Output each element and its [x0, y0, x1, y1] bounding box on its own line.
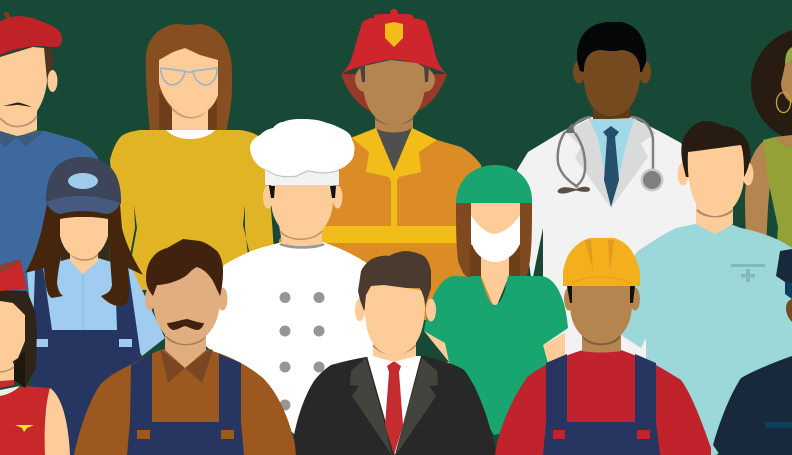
worker ears — [564, 288, 574, 310]
beret man neck shadow — [0, 116, 37, 126]
suit neck — [373, 335, 416, 362]
figure: police officer — [713, 249, 792, 455]
doctor white coat lapels — [566, 118, 656, 208]
doctor face — [584, 50, 640, 116]
figure: man in beret — [0, 12, 112, 300]
chef sideburns — [269, 186, 336, 198]
scrubs man plus sign — [741, 269, 755, 282]
suit neck shadow — [373, 345, 416, 354]
cap woman neck shadow — [71, 254, 98, 260]
afro hair — [751, 28, 792, 142]
cap woman light blue shirt — [27, 258, 165, 356]
worker overalls — [543, 354, 660, 455]
afro woman arm — [745, 140, 772, 250]
afro woman headband — [785, 47, 792, 65]
stethoscope chest piece — [640, 168, 664, 192]
firefighter helmet badge — [385, 22, 403, 47]
officer cap band — [785, 281, 792, 299]
firefighter yellow stripes — [300, 177, 462, 243]
nurse green scrubs — [424, 276, 568, 435]
nurse arm — [424, 320, 565, 366]
cap woman face — [60, 217, 108, 259]
scrubs man neck shadow — [697, 210, 733, 216]
worker neck shadow — [583, 336, 620, 344]
sweater arm gaps — [130, 205, 250, 255]
beret — [0, 16, 62, 55]
attendant hat fold — [0, 259, 21, 273]
afro woman olive top — [763, 137, 792, 370]
cap woman shirt placket — [82, 274, 84, 330]
moustache man face — [153, 265, 220, 344]
beret man collar — [0, 131, 45, 147]
scrubs man ears — [678, 162, 688, 186]
beret man hair — [0, 46, 53, 84]
beret man face — [0, 47, 47, 124]
attendant face — [0, 301, 25, 370]
cap woman overalls — [30, 267, 145, 455]
beret man blue shirt — [0, 131, 112, 300]
beret man ear — [48, 70, 58, 92]
nurse inner hair shade — [470, 240, 520, 280]
suit lapels — [350, 358, 438, 455]
afro woman skin at neck — [775, 135, 792, 147]
attendant neck — [0, 362, 14, 385]
officer dark uniform — [713, 356, 792, 455]
glasses woman hair inner shade — [159, 90, 217, 132]
glasses woman face — [159, 48, 218, 117]
afro woman face edge — [781, 60, 792, 103]
doctor ears — [573, 60, 585, 84]
doctor neck shadow — [593, 110, 630, 118]
worker face — [570, 285, 632, 343]
figure: woman with afro — [745, 28, 792, 370]
nurse neck — [481, 250, 509, 310]
scrubs man hair — [681, 121, 750, 177]
cap woman fringe — [60, 212, 108, 219]
glasses woman yellow sweater — [110, 130, 276, 290]
cap woman hair back — [61, 205, 109, 265]
attendant red dress — [0, 386, 50, 455]
chef face — [271, 184, 333, 238]
attendant hair shade — [14, 350, 25, 388]
doctor coat sleeve gap — [533, 228, 543, 277]
chef jacket buttons — [280, 292, 324, 410]
cap woman cap brim — [46, 196, 120, 214]
nurse face — [471, 202, 520, 245]
figure: woman with glasses — [110, 24, 276, 290]
moustache man overall pockets — [137, 430, 234, 439]
doctor tie — [603, 126, 619, 207]
doctor white coat — [517, 117, 701, 380]
chef ears — [263, 186, 273, 208]
beret man moustache — [3, 102, 32, 107]
scrubs man face — [688, 145, 744, 216]
glasses woman neck — [172, 100, 208, 131]
attendant badge wings — [15, 425, 34, 432]
suit ears — [355, 298, 365, 322]
figure: construction worker in hard hat — [495, 238, 711, 455]
scrubs man pocket line — [731, 264, 765, 267]
firefighter sideburns — [360, 66, 429, 82]
chef hat puff — [250, 119, 355, 176]
scrubs man neck — [696, 195, 733, 234]
firefighter helmet — [341, 9, 447, 74]
cap woman cap crown — [46, 157, 121, 204]
moustache man collar — [160, 349, 213, 383]
firefighter yellow collar — [352, 128, 437, 187]
worker overall pockets — [553, 430, 650, 439]
attendant hair — [0, 290, 37, 388]
chef neck shadow — [280, 231, 322, 239]
glasses woman white collar — [166, 130, 215, 139]
cap woman long hair — [25, 204, 143, 306]
attendant hat — [0, 259, 27, 291]
chef hat band — [265, 165, 339, 185]
moustache man neck shadow — [166, 336, 205, 344]
nurse green cap — [456, 165, 532, 203]
stethoscope — [558, 117, 653, 187]
worker hard hat — [563, 238, 640, 286]
glasses woman neck shadow — [172, 108, 208, 118]
attendant white collar — [0, 386, 20, 396]
officer cap — [776, 249, 792, 284]
doctor hair — [577, 22, 646, 72]
doctor blue shirt — [589, 119, 634, 208]
worker red shirt — [495, 350, 711, 455]
suit tie — [385, 361, 403, 455]
officer chest stripe — [765, 422, 792, 428]
stethoscope clip — [564, 123, 575, 133]
firefighter brim underside — [341, 74, 447, 110]
beret man neck — [0, 100, 37, 137]
moustache man ears — [145, 288, 155, 310]
moustache man neck — [165, 325, 206, 368]
afro woman earring — [776, 92, 790, 112]
attendant arm — [45, 388, 70, 455]
firefighter neck — [375, 105, 413, 133]
cap woman neck — [70, 250, 98, 274]
doctor neck — [593, 100, 630, 135]
attendant neck scarf red — [0, 380, 14, 388]
figure: firefighter — [279, 9, 500, 320]
nurse hair — [456, 203, 532, 280]
hard hat brim line — [572, 277, 630, 283]
figure: man with moustache in overalls — [74, 239, 297, 455]
suit jacket — [294, 356, 497, 455]
worker neck — [582, 330, 621, 352]
stethoscope earpieces — [558, 187, 590, 194]
firefighter orange jacket — [279, 128, 500, 320]
figure: man in light blue scrubs — [621, 121, 792, 455]
figure: doctor — [517, 22, 701, 380]
chef neck — [279, 225, 322, 247]
glasses woman hair — [146, 24, 232, 132]
beret stem — [3, 12, 13, 24]
suit man hair — [358, 251, 431, 311]
figure: nurse with mask — [424, 165, 568, 435]
chef jacket — [205, 242, 375, 435]
firefighter hair — [357, 58, 431, 84]
chef hat fold line — [266, 170, 339, 177]
moustache — [167, 319, 204, 330]
hard hat ridge shadows — [585, 240, 614, 271]
suit man face — [365, 285, 425, 355]
firefighter ears — [355, 68, 435, 92]
figure: chef — [205, 119, 375, 435]
glasses — [161, 68, 217, 85]
figure: man in suit — [294, 251, 497, 455]
moustache man hair — [146, 239, 223, 296]
firefighter neck shadow — [375, 118, 413, 124]
firefighter grey undershirt — [375, 128, 412, 172]
worker sideburns — [567, 286, 635, 303]
suit shirt — [367, 356, 421, 455]
attendant neck shadow — [0, 367, 14, 372]
scrubs man body — [621, 222, 792, 455]
chef collar — [279, 243, 325, 249]
officer skin — [786, 299, 792, 322]
nurse mask — [471, 215, 520, 262]
moustache man overalls — [127, 353, 244, 455]
firefighter face — [363, 60, 425, 125]
figure: woman with blue cap — [25, 157, 165, 455]
cap woman overall pockets — [36, 339, 132, 347]
figure: flight attendant — [0, 259, 70, 455]
moustache man brown shirt — [74, 349, 297, 455]
cap woman cap oval badge — [68, 173, 98, 189]
